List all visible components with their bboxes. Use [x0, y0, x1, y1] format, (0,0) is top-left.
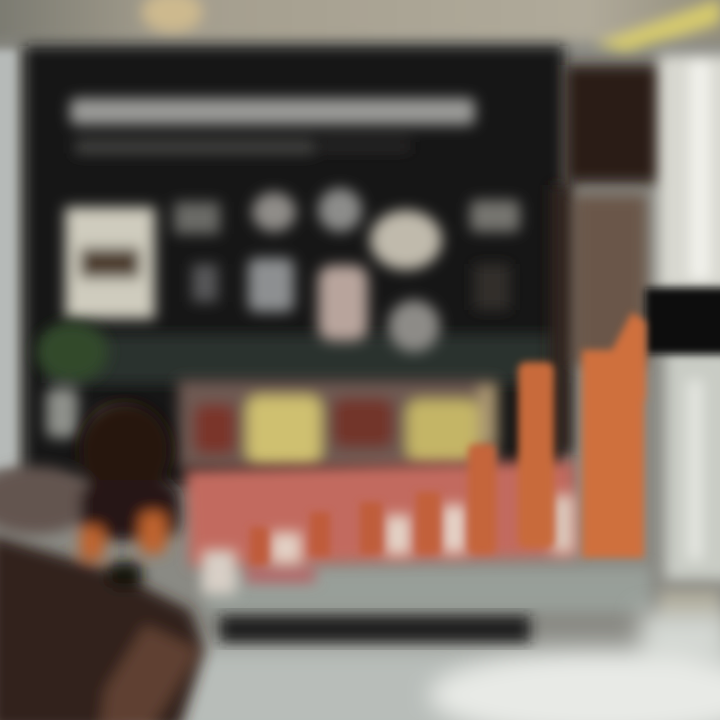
bar: shorter: [360, 502, 382, 554]
left wall strip: [0, 50, 16, 470]
floor: [130, 612, 720, 720]
bar: smaller: [250, 527, 268, 565]
sofa base: [205, 568, 720, 624]
plant: [36, 322, 135, 444]
right brown panels: [550, 65, 665, 455]
chair: [0, 535, 205, 720]
foreground chair and person: [0, 402, 205, 720]
wall pictures: [65, 188, 520, 352]
bar: medium: [468, 444, 496, 554]
sofa shadow: [220, 616, 530, 642]
bar: tallest: [582, 350, 644, 558]
wall heading: [70, 98, 475, 154]
ceiling: [0, 0, 720, 52]
picture: framed large: [65, 207, 155, 319]
pink table cloth: [185, 460, 578, 582]
dark centre accent: [108, 562, 142, 588]
dark wall: [24, 46, 564, 486]
chair arm: [100, 625, 200, 720]
white gaps in cloth: [202, 495, 574, 594]
sofa back and cushions: [178, 380, 498, 468]
orange bar chart: [250, 312, 646, 565]
right window: [658, 55, 720, 580]
person head: [79, 402, 171, 498]
orange accent right: [140, 512, 166, 554]
black window bar: [645, 288, 720, 354]
person shoulders: [80, 480, 180, 540]
orange accent left: [80, 526, 104, 560]
bar: tall: [518, 362, 554, 548]
bar: short: [416, 492, 440, 554]
picture: small frames: [174, 188, 520, 352]
chair top: [0, 466, 95, 534]
bar: small: [310, 512, 330, 556]
